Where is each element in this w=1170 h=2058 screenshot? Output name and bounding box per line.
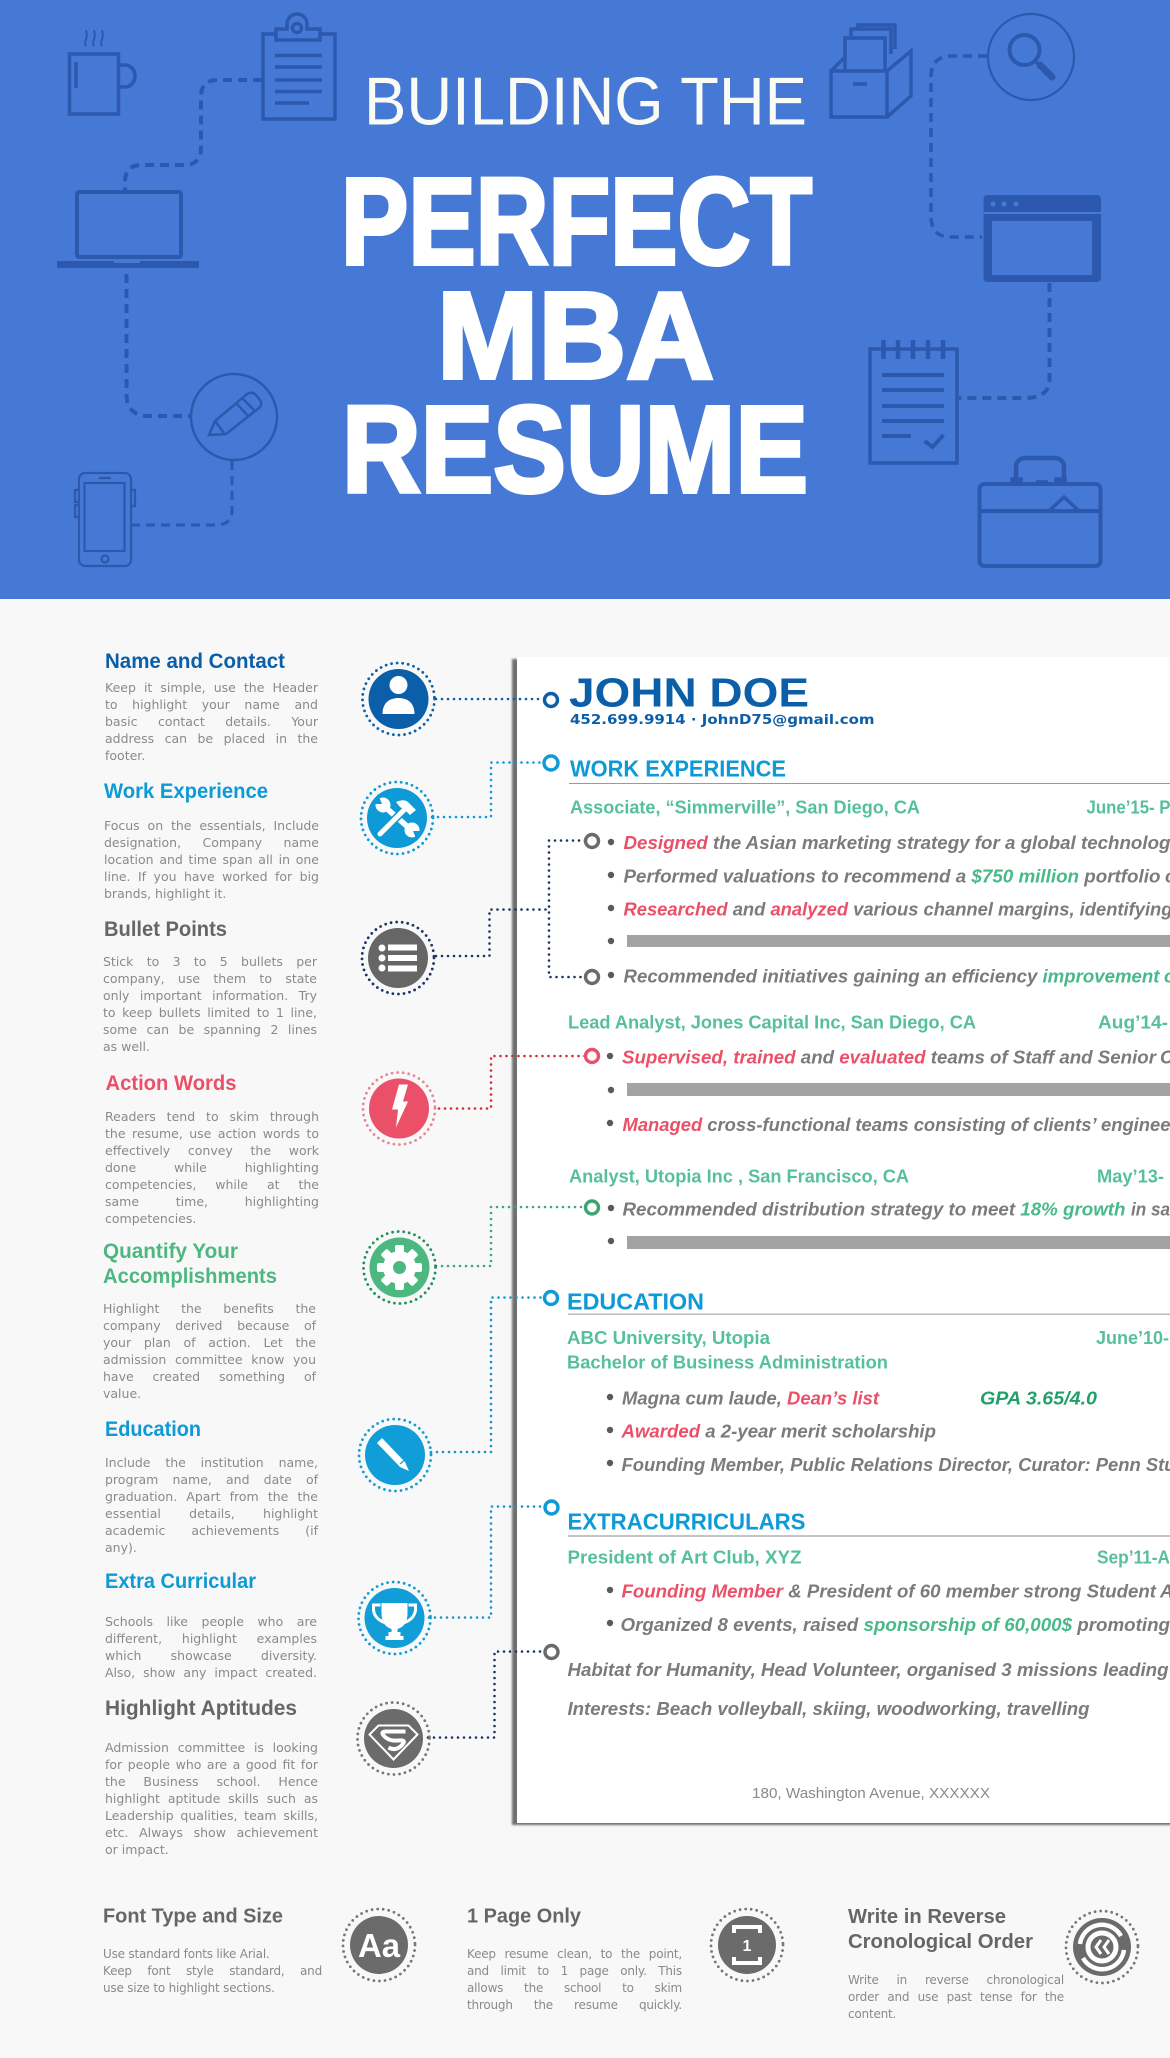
panel: resume sheet — [517, 657, 1170, 1823]
icon: Aa: Aa — [358, 1927, 401, 1964]
heading: write in reverse chronological order: Cronological Order — [848, 1931, 1033, 1953]
bullet: designed: Designed the Asian marketing strategy for a global technolog — [624, 832, 1170, 853]
resume heading: extracurriculars: EXTRACURRICULARS — [568, 1508, 806, 1534]
text: write in reverse: order and use past tense for the — [848, 1990, 1064, 2004]
text: highlight aptitudes — [105, 1740, 318, 1856]
text: highlight aptitudes: Admission committee is looking — [105, 1740, 318, 1754]
dashed path: laptop to pencil — [126, 274, 191, 416]
text: quantify — [103, 1300, 316, 1400]
title: resume: RESUME — [342, 382, 808, 519]
job title: analyst: Analyst, Utopia Inc , San Francisco, CA — [569, 1166, 909, 1186]
school date: June’10- — [1096, 1327, 1169, 1348]
icon: laptop — [57, 192, 199, 268]
icon: smartphone — [75, 473, 135, 566]
text: highlight aptitudes: Leadership qualities, team skills, — [105, 1808, 318, 1822]
connector: education — [431, 1292, 558, 1452]
text: quantify: value. — [103, 1386, 141, 1400]
bullet: managed: Managed cross-functional teams consisting of clients’ enginee — [622, 1114, 1170, 1135]
text: work experience: brands, highlight it. — [104, 886, 226, 900]
icon: pencil in circle — [191, 374, 277, 460]
heading: name and contact: Name and Contact — [105, 650, 285, 673]
heading: quantify your accomplishments — [103, 1240, 277, 1288]
text: 1 page only: Keep resume clean, to the point, — [467, 1947, 682, 1961]
text: name and contact: basic contact details. Your — [105, 714, 318, 729]
heading: quantify your accomplishments: Quantify Your — [103, 1240, 238, 1263]
title: mba: MBA — [437, 268, 714, 405]
text: action words: competencies, while at the — [105, 1176, 319, 1192]
gpa: GPA 3.65/4.0 — [980, 1388, 1098, 1408]
text: action words: same time, highlighting — [105, 1194, 319, 1208]
text: highlight aptitudes: etc. Always show achievement — [105, 1824, 318, 1840]
text: education: Include the institution name, — [105, 1455, 318, 1470]
text: extra curricular — [105, 1614, 317, 1680]
text: education — [105, 1455, 318, 1555]
icon: magnifier in circle — [988, 14, 1074, 100]
resume: name: JOHN DOE — [569, 670, 809, 716]
bullet: redacted bar — [608, 1236, 1170, 1249]
icon: reverse order — [1066, 1911, 1138, 1983]
text: bullet points: company, use them to state — [103, 971, 317, 986]
text: education: academic achievements (if — [105, 1523, 318, 1538]
heading: extra curricular: Extra Curricular — [105, 1570, 256, 1593]
text: bullet points: Stick to 3 to 5 bullets per — [103, 954, 317, 969]
icon: wrench and hammer — [361, 782, 433, 854]
text: quantify: Highlight the benefits the — [103, 1300, 316, 1316]
job title: lead analyst: Lead Analyst, Jones Capital Inc, San Diego, CA — [568, 1012, 976, 1032]
icon: briefcase — [980, 458, 1100, 566]
bullet: performed valuations: Performed valuations to recommend a $750 million portfolio — [624, 866, 1160, 886]
icon: one page — [711, 1909, 783, 1981]
rule: extracurriculars — [568, 1536, 1170, 1537]
rule: education — [568, 1314, 1170, 1315]
text: 1 page only: and limit to 1 page only. This — [467, 1964, 682, 1978]
text: action words: competencies. — [105, 1210, 196, 1226]
bullet: redacted bar — [608, 1083, 1170, 1096]
heading: 1 page only: 1 Page Only — [467, 1906, 582, 1928]
heading: quantify your accomplishments: Accomplishments — [103, 1265, 277, 1288]
rule: work experience — [569, 783, 1170, 784]
job title: associate: Associate, “Simmerville”, San Diego, CA — [570, 796, 920, 818]
text: 1 page only — [467, 1947, 682, 2012]
heading: action words: Action Words — [106, 1072, 236, 1095]
heading: work experience: Work Experience — [104, 780, 268, 803]
text: bullet points: some can be spanning 2 lines — [103, 1022, 317, 1037]
dashed path: clipboard to laptop — [125, 80, 262, 191]
icon: superhero shield — [358, 1702, 430, 1774]
text: name and contact: address can be placed in the — [105, 731, 318, 746]
heading: write in reverse chronological order — [848, 1906, 1033, 1953]
icon: Aa — [343, 1909, 415, 1981]
connector: action words — [439, 1050, 598, 1108]
text: extra curricular: Also, show any impact created. — [105, 1664, 317, 1680]
connector: quantify — [436, 1201, 598, 1266]
bullet: researched: Researched and analyzed various channel margins, identifying — [624, 898, 1170, 920]
title: perfect: PERFECT — [341, 154, 812, 291]
text: highlight aptitudes: or impact. — [105, 1842, 169, 1856]
text: action words: Readers tend to skim through — [105, 1108, 319, 1124]
title: building the: BUILDING THE — [364, 64, 807, 140]
heading: font type and size: Font Type and Size — [103, 1906, 283, 1928]
text: write in reverse: Write in reverse chronological — [848, 1973, 1064, 1987]
bullet: supervised: Supervised, trained and evaluated teams of Staff and Senior — [622, 1046, 1158, 1068]
text: font type and size: Use standard fonts like Arial. — [103, 1947, 270, 1961]
text: action words — [105, 1108, 319, 1226]
icon: trophy — [358, 1582, 430, 1654]
bullet: awarded: Awarded a 2-year merit scholarship — [620, 1420, 936, 1442]
icon: file box — [831, 25, 911, 117]
text: quantify: admission committee know you — [103, 1352, 316, 1366]
connector: work experience — [432, 756, 558, 817]
text: education: graduation. Apart from the the — [105, 1489, 318, 1504]
resume footer address: 180, Washington Avenue, XXXXXX — [752, 1785, 990, 1802]
resume heading: work experience: WORK EXPERIENCE — [570, 756, 786, 782]
icon: gear — [364, 1232, 436, 1304]
job date: lead analyst: Aug’14- — [1098, 1012, 1168, 1032]
icon: bullet list — [362, 922, 434, 994]
bullet: recommended initiatives: Recommended initiatives gaining an efficiency improvement — [624, 966, 1160, 986]
text: extra curricular: different, highlight examples — [105, 1630, 317, 1646]
icon: one page: 1 — [743, 1938, 752, 1955]
text: education: essential details, highlight — [105, 1506, 318, 1521]
icon: person — [362, 663, 434, 735]
heading: write in reverse chronological order: Write in Reverse — [848, 1906, 1006, 1928]
text: bullet points: only important information. Try — [103, 988, 317, 1003]
text: write in reverse — [848, 1973, 1064, 2021]
club title: President of Art Club, XYZ — [568, 1546, 802, 1568]
bullet: organized events: Organized 8 events, raised sponsorship of 60,000$ promoting — [620, 1614, 1170, 1635]
text: bullet points — [103, 954, 317, 1054]
text: quantify: company derived because of — [103, 1318, 316, 1332]
text: work experience: designation, Company name — [104, 834, 319, 850]
text: action words: effectively convey the work — [105, 1142, 319, 1158]
text: work experience: line. If you have worked for big — [104, 868, 319, 884]
text: quantify: have created something of — [103, 1368, 316, 1384]
text: highlight aptitudes: highlight aptitude skills such as — [105, 1790, 318, 1806]
text: extra curricular: which showcase diversity. — [105, 1648, 317, 1662]
interests line: Interests: Beach volleyball, skiing, woodworking, travelling — [568, 1698, 1090, 1719]
text: quantify: your plan of action. Let the — [103, 1334, 316, 1350]
text: write in reverse: content. — [848, 2007, 896, 2021]
text: bullet points: to keep bullets limited to 1 line, — [103, 1005, 317, 1020]
habitat line: Habitat for Humanity, Head Volunteer, organised 3 missions leading — [568, 1659, 1168, 1680]
dashed path: pencil to phone — [132, 461, 232, 525]
text: highlight aptitudes: the Business school. Hence — [105, 1774, 318, 1788]
job date: analyst: May’13- — [1097, 1166, 1164, 1186]
school name: ABC University, Utopia — [567, 1327, 771, 1348]
icon: browser window — [984, 195, 1101, 282]
text: highlight aptitudes: for people who are a good fit for — [105, 1756, 318, 1772]
icon: clipboard — [263, 14, 335, 119]
text: work experience: location and time span all in one — [104, 852, 319, 866]
bullet: founding member education: Founding Member, Public Relations Director, Curator: Penn Stu — [622, 1454, 1170, 1475]
text: 1 page only: allows the school to skim — [467, 1981, 682, 1995]
text: education: program name, and date of — [105, 1472, 318, 1487]
text: name and contact: footer. — [105, 748, 145, 763]
connector: name and contact — [436, 694, 558, 706]
resume heading: education: EDUCATION — [567, 1288, 704, 1314]
bullet: magna cum laude: Magna cum laude, Dean’s list — [622, 1388, 880, 1408]
bullet: redacted bar — [608, 935, 1170, 947]
dashed path: window to notepad — [959, 283, 1050, 398]
header band — [0, 0, 1170, 599]
text: education: any). — [105, 1540, 137, 1555]
text: name and contact: Keep it simple, use the Header — [105, 680, 318, 695]
resume: contact details: 452.699.9914 · JohnD75@gmail.com — [570, 712, 874, 728]
icon: pencil — [359, 1419, 431, 1491]
text: work experience: Focus on the essentials, Include — [104, 818, 319, 832]
text: font type and size: use size to highlight sections. — [103, 1981, 275, 1995]
connector: bullet points — [436, 834, 598, 984]
degree: Bachelor of Business Administration — [567, 1352, 888, 1372]
bullet: distribution strategy: Recommended distribution strategy to meet 18% growth — [622, 1198, 1126, 1220]
text: name and contact: to highlight your name and — [105, 697, 318, 712]
connector: extra curricular — [429, 1501, 558, 1618]
heading: bullet points: Bullet Points — [104, 918, 227, 941]
icon: lightning bolt — [363, 1072, 435, 1144]
text: extra curricular: Schools like people who are — [105, 1614, 317, 1628]
text: 1 page only: through the resume quickly. — [467, 1998, 682, 2012]
icon: notepad with check — [870, 340, 957, 463]
bullet: founding member club: Founding Member & President of 60 member strong Student — [622, 1580, 1157, 1602]
text: work experience — [104, 818, 319, 900]
heading: highlight aptitudes: Highlight Aptitudes — [105, 1697, 297, 1720]
text: name and contact — [105, 680, 318, 763]
text: action words: done while highlighting — [105, 1160, 319, 1174]
heading: education: Education — [105, 1418, 201, 1441]
connector: highlight aptitudes — [428, 1646, 558, 1738]
text: bullet points: as well. — [103, 1039, 150, 1054]
dashed path: magnifier to window — [931, 56, 987, 237]
text: font type and size — [103, 1947, 322, 1995]
text: font type and size: Keep font style standard, and — [103, 1964, 322, 1978]
icon: coffee mug — [70, 30, 135, 114]
text: action words: the resume, use action words to — [105, 1126, 319, 1140]
